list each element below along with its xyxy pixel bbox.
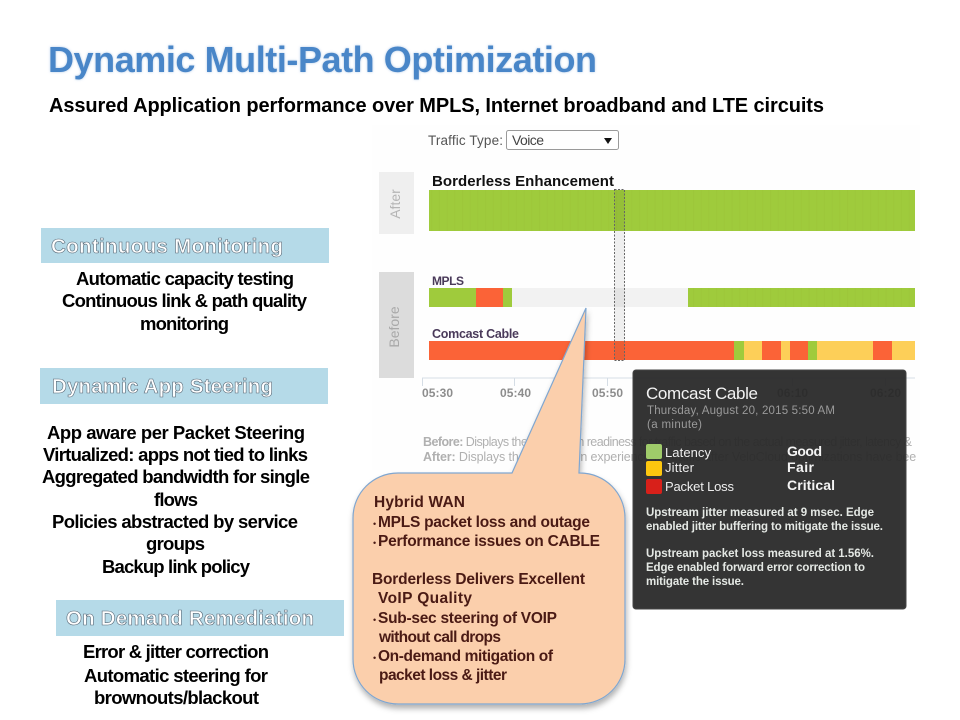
- borderless enhancement bar: Borderless Enhancement: [432, 173, 614, 190]
- time axis: 06:20: [870, 386, 901, 400]
- time axis: [422, 378, 915, 400]
- MPLS bar: [429, 274, 915, 307]
- chart footnote: [423, 435, 923, 464]
- after side label: After: [387, 189, 403, 219]
- tooltip heading: Comcast Cable: [646, 384, 758, 403]
- tooltip jitter note: enabled jitter buffering to mitigate the issue.: [646, 521, 883, 533]
- MPLS bar: MPLS: [432, 274, 464, 288]
- heading: on demand remediation: On Demand Remediation: [66, 607, 314, 630]
- text block: on demand remediation points: [83, 641, 269, 708]
- chart: traffic quality timeline: [372, 125, 923, 470]
- traffic type selector: Voice: [512, 132, 544, 148]
- Comcast Cable bar: [429, 327, 915, 360]
- tooltip legend: Packet Loss: [665, 479, 734, 494]
- callout text: borderless: •: [373, 615, 376, 625]
- text block: dynamic app steering points: [42, 422, 310, 577]
- callout text: borderless: packet loss & jitter: [379, 667, 507, 684]
- tooltip legend: Critical: [787, 477, 835, 493]
- text block: continuous monitoring points: Automatic capacity testing: [76, 268, 294, 289]
- borderless enhancement bar: [429, 173, 915, 231]
- time axis: 05:40: [500, 386, 531, 400]
- heading: continuous monitoring: [41, 228, 329, 263]
- callout text: borderless: Sub-sec steering of VOIP: [378, 610, 557, 627]
- callout text: hybrid WAN: [373, 494, 600, 550]
- tooltip legend: [646, 443, 835, 494]
- traffic type selector: Traffic Type:: [428, 133, 503, 148]
- callout text: hybrid WAN: Performance issues on CABLE: [378, 533, 600, 550]
- callout text: borderless: •: [373, 653, 376, 663]
- tooltip legend: Good: [787, 443, 822, 459]
- text block: dynamic app steering points: Policies abstracted by service: [52, 511, 298, 532]
- subtitle: Assured Application performance over MPLS, Internet broadband and LTE circuits: [49, 95, 824, 117]
- title: Dynamic Multi-Path Optimization: [48, 39, 597, 80]
- callout text: hybrid WAN: •: [373, 538, 376, 548]
- callout: hybrid WAN and borderless summary: [353, 308, 625, 704]
- traffic type selector: [428, 130, 618, 150]
- tooltip date: [647, 405, 835, 431]
- Comcast Cable bar: Comcast Cable: [432, 327, 519, 341]
- panel: continuous monitoring: [41, 228, 329, 334]
- text block: continuous monitoring points: [62, 268, 308, 334]
- tooltip date: (a minute): [647, 419, 702, 431]
- text block: dynamic app steering points: Virtualized: apps not tied to links: [43, 444, 308, 465]
- callout text: borderless: On-demand mitigation of: [378, 648, 554, 665]
- tooltip packet loss note: Edge enabled forward error correction to: [646, 562, 865, 574]
- tooltip jitter note: Upstream jitter measured at 9 msec. Edge: [646, 507, 874, 519]
- text block: dynamic app steering points: Aggregated bandwidth for single: [42, 466, 310, 487]
- text block: dynamic app steering points: groups: [146, 533, 205, 554]
- before side label: [379, 272, 414, 378]
- tooltip packet loss note: [646, 548, 874, 588]
- callout text: hybrid WAN: MPLS packet loss and outage: [378, 514, 590, 531]
- tooltip legend: Latency: [665, 445, 712, 460]
- tooltip packet loss note: mitigate the issue.: [646, 576, 744, 588]
- tooltip legend: Fair: [787, 459, 815, 475]
- selected time marker: [614, 190, 624, 360]
- time axis: 05:50: [592, 386, 623, 400]
- tooltip date: Thursday, August 20, 2015 5:50 AM: [647, 405, 835, 417]
- heading: dynamic app steering: Dynamic App Steering: [52, 375, 273, 398]
- text block: dynamic app steering points: App aware per Packet Steering: [47, 422, 305, 443]
- tooltip panel: Comcast Cable details: [633, 370, 906, 609]
- text block: dynamic app steering points: Backup link policy: [102, 556, 251, 577]
- chart footnote: Before: Displays the application readiness for traffic based on the actual measured jitter, latency &: [423, 435, 913, 449]
- callout text: borderless: without call drops: [378, 629, 501, 646]
- callout text: borderless: VoIP Quality: [378, 590, 472, 607]
- text block: dynamic app steering points: flows: [154, 489, 198, 510]
- tooltip packet loss note: Upstream packet loss measured at 1.56%.: [646, 548, 874, 560]
- after side label: [379, 172, 414, 234]
- callout text: borderless: Borderless Delivers Excellent: [372, 571, 585, 588]
- time axis: 06:10: [777, 386, 808, 400]
- tooltip jitter note: [646, 507, 883, 533]
- panel: dynamic app steering: [40, 368, 328, 577]
- heading: continuous monitoring: Continuous Monitoring: [51, 235, 283, 258]
- callout text: hybrid WAN: Hybrid WAN: [374, 494, 465, 511]
- text block: on demand remediation points: Error & jitter correction: [83, 641, 269, 662]
- before side label: Before: [386, 306, 402, 348]
- text block: on demand remediation points: brownouts/blackout: [94, 687, 259, 708]
- heading: on demand remediation: [56, 600, 344, 636]
- heading: dynamic app steering: [40, 368, 328, 404]
- panel: on demand remediation: [56, 600, 344, 708]
- text block: continuous monitoring points: monitoring: [140, 313, 229, 334]
- tooltip legend: Jitter: [665, 460, 695, 475]
- chart footnote: After: Displays the application experience for traffic after VeloCloud optimizations have been: [423, 450, 923, 464]
- callout text: borderless: [372, 571, 585, 684]
- callout text: hybrid WAN: •: [373, 519, 376, 529]
- text block: on demand remediation points: Automatic steering for: [84, 665, 268, 686]
- time axis: 05:30: [422, 386, 453, 400]
- text block: continuous monitoring points: Continuous link & path quality: [62, 290, 308, 311]
